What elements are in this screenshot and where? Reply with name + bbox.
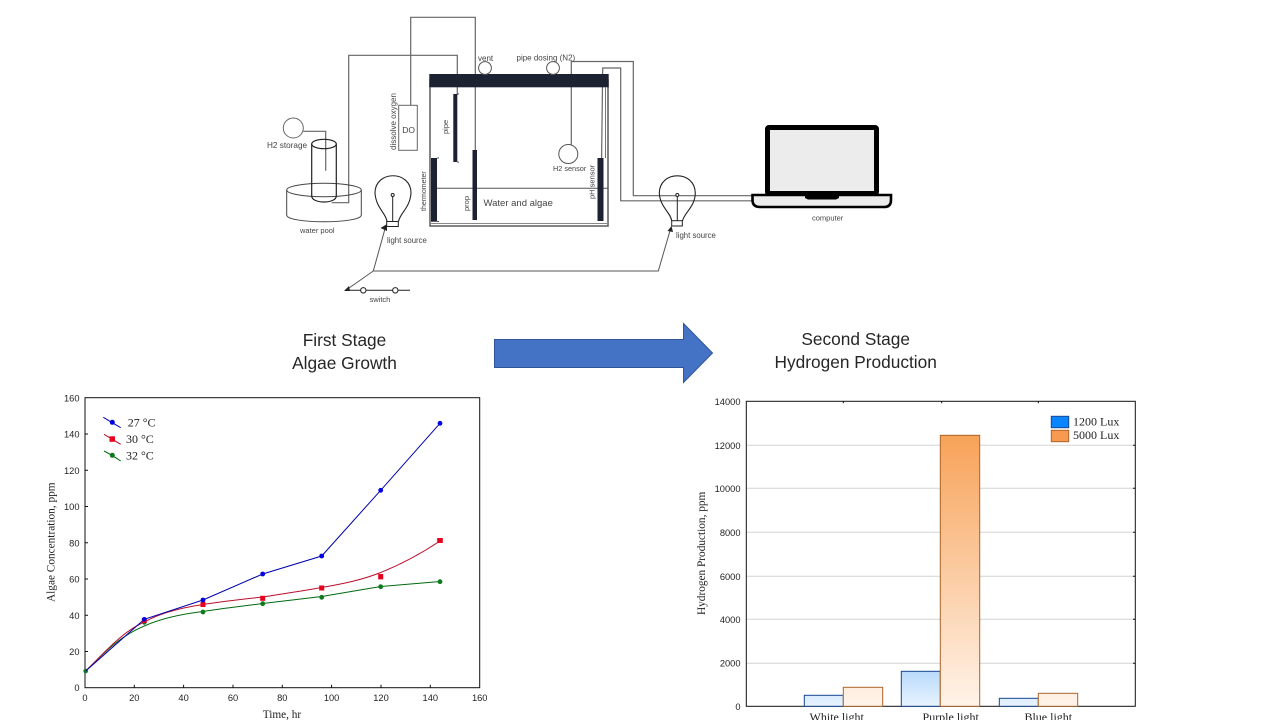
wire: H2 sensor to computer: [571, 62, 752, 196]
x axis labels: 140: [423, 693, 438, 703]
heading: first stage: Algae Growth: [292, 353, 397, 373]
y axis labels: 160: [64, 394, 80, 404]
x axis labels: [810, 710, 1073, 720]
y axis title: Hydrogen Production, ppm: [696, 491, 708, 615]
x axis labels: 20: [129, 693, 139, 703]
legend: [1051, 414, 1119, 442]
label: dissolve oxygen: dissolve oxygen: [389, 93, 398, 150]
label: prop: prop: [462, 196, 471, 211]
legend: 5000 Lux: [1073, 428, 1119, 442]
DO box: [399, 105, 417, 150]
water pool with cylinder: water pool: [299, 226, 335, 235]
wiring and arrows to lights: [344, 224, 673, 291]
y axis labels: 20: [69, 647, 80, 657]
schematic: experimental setup: [267, 17, 891, 304]
y axis title: Algae Concentration, ppm: [46, 482, 58, 602]
wire: water pool to pipe: [332, 55, 457, 203]
legend: 27 °C: [128, 416, 156, 430]
legend: 1200 Lux: [1073, 414, 1119, 428]
y axis labels: 0: [74, 683, 80, 693]
y axis labels: 12000: [715, 441, 740, 451]
heading: first stage: First Stage: [303, 330, 386, 350]
x axis labels: 40: [178, 693, 189, 703]
x axis labels: [82, 693, 487, 703]
legend: 32 °C: [126, 448, 154, 462]
heading: second stage: Second Stage: [801, 329, 910, 349]
switch: switch: [370, 295, 390, 304]
light source right: light source: [676, 231, 716, 240]
light source left: [375, 176, 427, 245]
y axis labels: 4000: [720, 615, 740, 625]
y axis labels: 80: [69, 538, 80, 548]
bars: purple light: [901, 435, 980, 706]
H2 storage: H2 storage: [267, 141, 307, 150]
series: 30 C: [86, 538, 443, 671]
switch: [345, 288, 410, 304]
light source left: light source: [387, 236, 427, 245]
light source right: [659, 176, 716, 240]
x axis labels: 120: [373, 693, 389, 703]
y axis labels: 2000: [720, 658, 740, 668]
y axis labels: 140: [64, 430, 80, 440]
y axis labels: 10000: [715, 484, 740, 494]
line chart: algae concentration: [46, 394, 487, 720]
bars: white light: [804, 687, 883, 706]
y axis labels: 0: [735, 702, 740, 712]
y axis labels: [64, 394, 80, 693]
vent: vent: [478, 54, 494, 63]
H2 sensor: H2 sensor: [553, 164, 587, 173]
y axis labels: 40: [69, 611, 80, 621]
pH sensor probe: [598, 158, 604, 221]
icon: computer: [752, 128, 891, 222]
reactor tank: [429, 74, 609, 226]
y axis labels: 120: [64, 466, 80, 476]
thermometer probe: [431, 158, 439, 222]
pipe probe: [453, 94, 459, 162]
gridlines and frame: [746, 401, 1135, 706]
plot frame and ticks: [85, 398, 480, 688]
label: pipe: pipe: [441, 120, 450, 134]
H2 storage: [267, 118, 326, 171]
x axis labels: 80: [277, 693, 287, 703]
x axis labels: 100: [324, 693, 339, 703]
wire: pH sensor to computer: [602, 68, 752, 201]
y axis labels: 60: [69, 574, 80, 584]
x axis labels: 60: [228, 693, 238, 703]
label: water and algae: Water and algae: [484, 198, 553, 209]
bars: blue light: [999, 693, 1078, 706]
x axis labels: 0: [82, 693, 88, 703]
arrow: first to second stage: [494, 324, 712, 382]
legend: [103, 416, 156, 462]
y axis labels: 8000: [720, 528, 740, 538]
DO box: DO: [402, 125, 415, 135]
pipe dosing: pipe dosing (N2): [516, 54, 576, 62]
y axis labels: 6000: [720, 572, 740, 582]
prop probe: [472, 150, 477, 220]
label: pH sensor: pH sensor: [588, 164, 596, 199]
H2 sensor: [553, 144, 587, 173]
series: 32 C: [83, 579, 442, 673]
y axis labels: 100: [64, 502, 80, 512]
heading: second stage: Hydrogen Production: [775, 352, 937, 372]
y axis labels: [715, 397, 740, 712]
icon: computer: computer: [812, 214, 844, 222]
label: thermometer: thermometer: [421, 171, 428, 211]
wire: dissolved oxygen to prop: [411, 17, 475, 150]
bar chart: hydrogen production: [696, 397, 1135, 720]
y axis labels: 14000: [715, 397, 740, 407]
legend: 30 °C: [126, 432, 154, 446]
series: 27 C: [86, 421, 442, 671]
vent: [478, 54, 494, 74]
x axis labels: 160: [472, 693, 487, 703]
pipe dosing: [516, 54, 576, 74]
water pool with cylinder: [287, 139, 361, 235]
